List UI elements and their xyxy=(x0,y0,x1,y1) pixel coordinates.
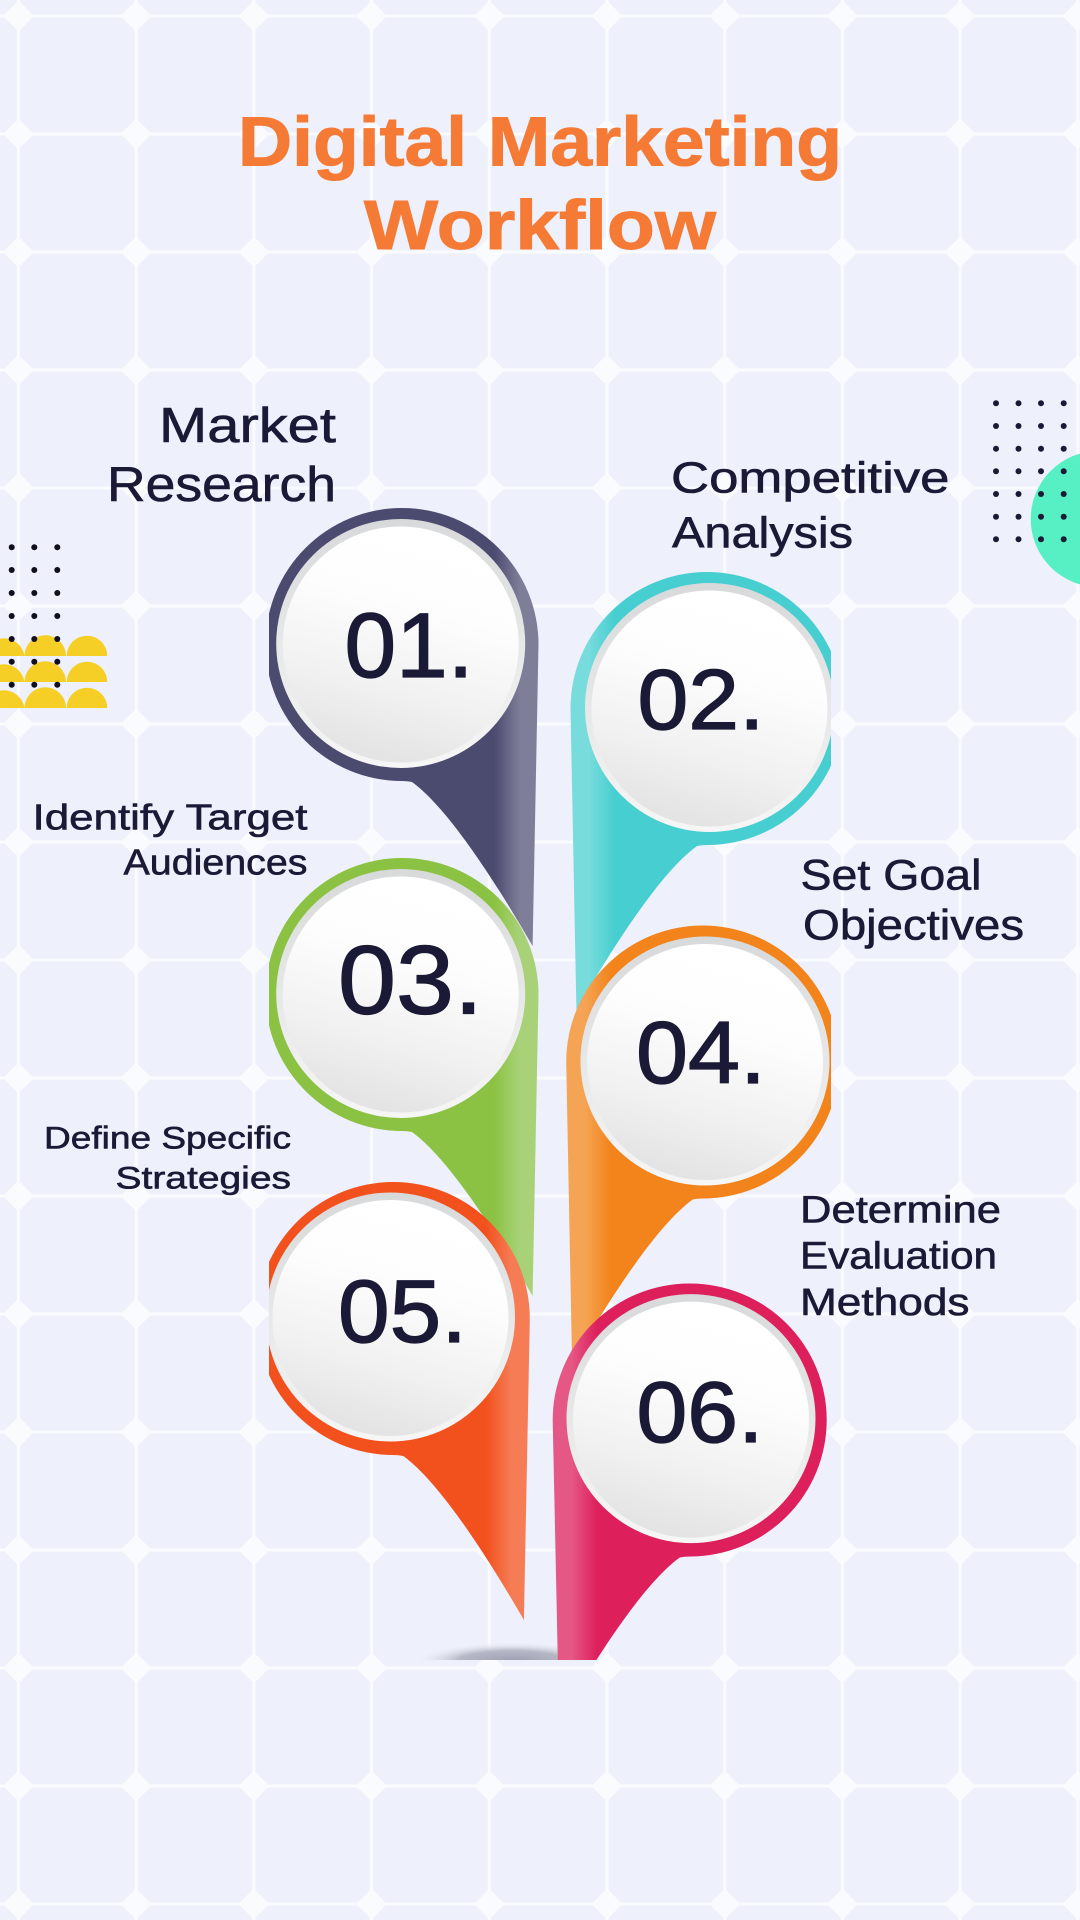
pin 01 xyxy=(266,508,538,946)
title xyxy=(238,103,842,264)
pin 06 xyxy=(552,1284,827,1660)
label: Determine Evaluation Methods xyxy=(800,1190,1001,1324)
label: Set Goal Objectives: Set Goal xyxy=(800,851,982,899)
label: Identify Target Audiences: Identify Target xyxy=(32,796,308,837)
decoration: yellow semicircles with dots xyxy=(0,544,107,708)
label: Determine Evaluation Methods: Determine xyxy=(800,1190,1001,1232)
pin 03 xyxy=(266,858,538,1296)
title: Workflow xyxy=(364,186,717,264)
label: Define Specific Strategies: Strategies xyxy=(116,1159,291,1195)
pin 05: 05. xyxy=(338,1261,467,1361)
label: Competitive Analysis xyxy=(671,454,950,558)
pin 04: 04. xyxy=(636,1003,766,1102)
pin 06: 06. xyxy=(636,1365,764,1461)
label: Determine Evaluation Methods: Methods xyxy=(800,1282,970,1324)
label: Market Research: Research xyxy=(107,458,336,512)
label: Determine Evaluation Methods: Evaluation xyxy=(800,1235,997,1277)
label: Define Specific Strategies xyxy=(44,1119,291,1195)
label: Identify Target Audiences xyxy=(32,796,308,882)
label: Market Research xyxy=(107,399,336,512)
pin 04 xyxy=(566,926,839,1364)
pin 02: 02. xyxy=(638,653,764,748)
pin 01: 01. xyxy=(344,595,474,697)
pin 05 xyxy=(257,1182,530,1620)
label: Define Specific Strategies: Define Specific xyxy=(44,1119,291,1155)
label: Market Research: Market xyxy=(159,399,336,453)
pin 03: 03. xyxy=(338,926,483,1034)
label: Identify Target Audiences: Audiences xyxy=(124,841,308,882)
label: Competitive Analysis: Competitive xyxy=(671,454,950,503)
title: Digital Marketing xyxy=(238,103,842,181)
label: Competitive Analysis: Analysis xyxy=(672,509,853,558)
ground shadow xyxy=(432,1645,558,1660)
label: Set Goal Objectives xyxy=(800,851,1024,949)
decoration: mint circle with dots xyxy=(993,400,1080,587)
label: Set Goal Objectives: Objectives xyxy=(803,901,1024,949)
pin 02 xyxy=(570,572,844,1010)
